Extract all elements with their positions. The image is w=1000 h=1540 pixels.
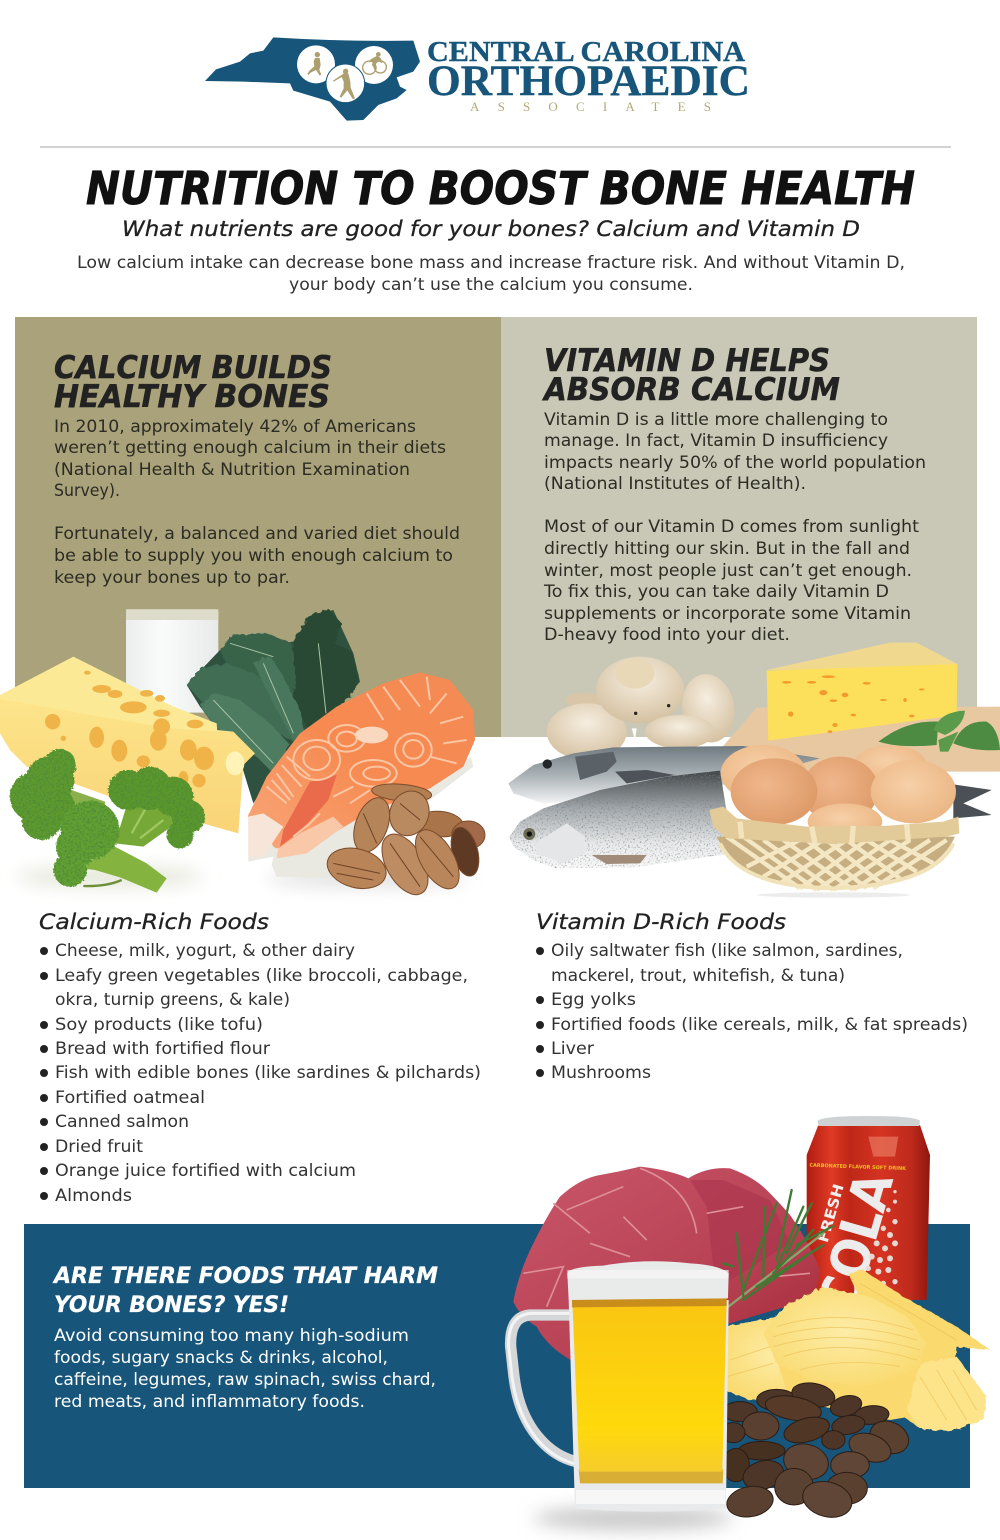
eggs — [721, 745, 956, 840]
bullet list — [40, 941, 481, 1205]
text: calcium paragraphs: Survey). — [54, 481, 120, 500]
broccoli — [10, 749, 205, 893]
heading: calcium builds healthy bones — [54, 350, 332, 415]
fish upper — [508, 746, 820, 803]
bullet list: Egg yolks — [551, 990, 636, 1009]
title: NUTRITION TO BOOST BONE HEALTH — [86, 162, 915, 215]
text: vitamin D paragraphs — [543, 410, 926, 644]
logo wordmark: CENTRAL CAROLINA — [427, 37, 745, 68]
text: vitamin D paragraphs: Most of our Vitamin D comes from sunlight — [544, 517, 920, 536]
fish lower — [509, 771, 733, 868]
text: vitamin D paragraphs: To fix this, you can take daily Vitamin D — [543, 582, 889, 601]
text: calcium paragraphs: (National Health & Nutrition Examination — [54, 460, 410, 479]
text: calcium paragraphs — [54, 417, 460, 587]
text: foods to avoid: Avoid consuming too many high-sodium — [54, 1326, 409, 1345]
intro text: Low calcium intake can decrease bone mass and increase fracture risk. And without Vitamin D, — [77, 253, 905, 272]
potato chips — [723, 1270, 990, 1432]
text: vitamin D paragraphs: impacts nearly 50% of the world population — [544, 453, 926, 472]
bullet list: Bread with fortified flour — [55, 1039, 270, 1058]
heading: vitamin D helps absorb calcium: VITAMIN D HELPS — [544, 343, 830, 379]
text: vitamin D paragraphs: supplements or incorporate some Vitamin — [544, 604, 911, 623]
pecans — [323, 782, 485, 902]
bullet list: mackerel, trout, whitefish, & tuna) — [551, 966, 845, 985]
basket shadow — [757, 892, 910, 898]
text: foods to avoid — [54, 1326, 436, 1411]
image: foods that harm bones — [509, 1116, 990, 1530]
tail — [953, 784, 992, 818]
text: calcium paragraphs: weren’t getting enough calcium in their diets — [54, 438, 446, 457]
text: foods to avoid: foods, sugary snacks & drinks, alcohol, — [54, 1348, 388, 1367]
heading: calcium builds healthy bones: CALCIUM BUILDS — [54, 350, 332, 386]
logo wordmark: ORTHOPAEDIC — [427, 58, 750, 105]
panel: calcium — [15, 317, 501, 737]
bullet list: Fortified foods (like cereals, milk, & fat spreads) — [551, 1015, 968, 1034]
bullet list: okra, turnip greens, & kale) — [55, 990, 290, 1009]
logo wordmark: ASSOCIATES — [470, 99, 711, 114]
red meat — [513, 1167, 820, 1362]
bullet list: Soy products (like tofu) — [55, 1015, 263, 1034]
text: vitamin D paragraphs: (National Institutes of Health). — [544, 474, 806, 493]
coffee beans — [722, 1380, 914, 1523]
bullet list: Dried fruit — [55, 1137, 144, 1156]
heading: foods that harm your bones: YOUR BONES? YES! — [54, 1292, 289, 1318]
text: vitamin D paragraphs: directly hitting our skin. But in the fall and — [544, 539, 910, 558]
panel: vitamin D — [501, 317, 977, 737]
icon: North Carolina state map — [205, 37, 420, 121]
text: foods to avoid: red meats, and inflammatory foods. — [54, 1392, 365, 1411]
text: foods to avoid: caffeine, legumes, raw spinach, swiss chard, — [54, 1370, 436, 1389]
heading: vitamin D helps absorb calcium: ABSORB CALCIUM — [541, 372, 840, 408]
beer mug — [509, 1261, 729, 1512]
image: vitamin D-rich foods — [508, 643, 1000, 898]
icon: runner — [297, 45, 335, 83]
intro text — [77, 253, 905, 294]
basket — [709, 807, 959, 890]
mushrooms — [547, 657, 740, 760]
basil — [878, 711, 1000, 752]
intro text: your body can’t use the calcium you consume. — [289, 275, 693, 294]
heading: foods that harm your bones: ARE THERE FOODS THAT HARM — [52, 1263, 438, 1289]
text: calcium paragraphs: keep your bones up to par. — [54, 568, 290, 587]
text: calcium paragraphs: be able to supply you with enough calcium to — [54, 546, 453, 565]
yellow cheese — [767, 643, 957, 741]
text: calcium paragraphs: Fortunately, a balanced and varied diet should — [54, 524, 460, 543]
text: vitamin D paragraphs: D-heavy food into your diet. — [544, 625, 790, 644]
bullet list: Mushrooms — [551, 1063, 651, 1082]
bullet list: Leafy green vegetables (like broccoli, cabbage, — [55, 966, 468, 985]
bullet list: Almonds — [55, 1186, 132, 1205]
heading: calcium builds healthy bones: HEALTHY BONES — [54, 379, 330, 415]
cola can: COLA — [806, 1164, 906, 1320]
panel: foods that harm — [24, 1224, 970, 1488]
cola can: FRESH — [815, 1182, 848, 1244]
heading: Calcium-Rich Foods — [39, 910, 269, 935]
text: calcium-rich foods — [39, 910, 481, 1205]
bullet list: Canned salmon — [55, 1112, 189, 1131]
bullet list: Cheese, milk, yogurt, & other dairy — [55, 941, 355, 960]
text: vitamin D paragraphs: manage. In fact, Vitamin D insufficiency — [544, 431, 888, 450]
cutting board — [723, 707, 1000, 772]
heading: vitamin D helps absorb calcium — [541, 343, 840, 408]
icon: golfer — [326, 64, 365, 103]
bullet list: Liver — [551, 1039, 594, 1058]
bullet list: Orange juice fortified with calcium — [55, 1161, 356, 1180]
subtitle: What nutrients are good for your bones? Calcium and Vitamin D — [122, 217, 860, 242]
kale — [187, 608, 360, 803]
logo — [205, 37, 750, 121]
bullet list — [536, 941, 968, 1082]
text: vitamin D-rich foods — [536, 910, 968, 1082]
text: vitamin D paragraphs: Vitamin D is a little more challenging to — [544, 410, 888, 429]
text: calcium paragraphs: In 2010, approximately 42% of Americans — [54, 417, 416, 436]
heading: foods that harm your bones — [52, 1263, 438, 1318]
bullet list: Oily saltwater fish (like salmon, sardines, — [551, 941, 903, 960]
rosemary — [723, 1190, 833, 1307]
bullet list: Fish with edible bones (like sardines & pilchards) — [55, 1063, 481, 1082]
bullet list: Fortified oatmeal — [55, 1088, 205, 1107]
icon: cyclist — [355, 46, 393, 84]
milk glass — [126, 609, 218, 713]
heading: Vitamin D-Rich Foods — [536, 910, 786, 935]
cola can: CARBONATED FLAVOR SOFT DRINK — [809, 1163, 907, 1172]
image: calcium-rich foods — [0, 608, 485, 902]
text: vitamin D paragraphs: winter, most people just can’t get enough. — [544, 561, 912, 580]
salmon steak — [248, 672, 475, 878]
logo wordmark — [427, 37, 750, 114]
cheese wedge — [0, 657, 255, 833]
